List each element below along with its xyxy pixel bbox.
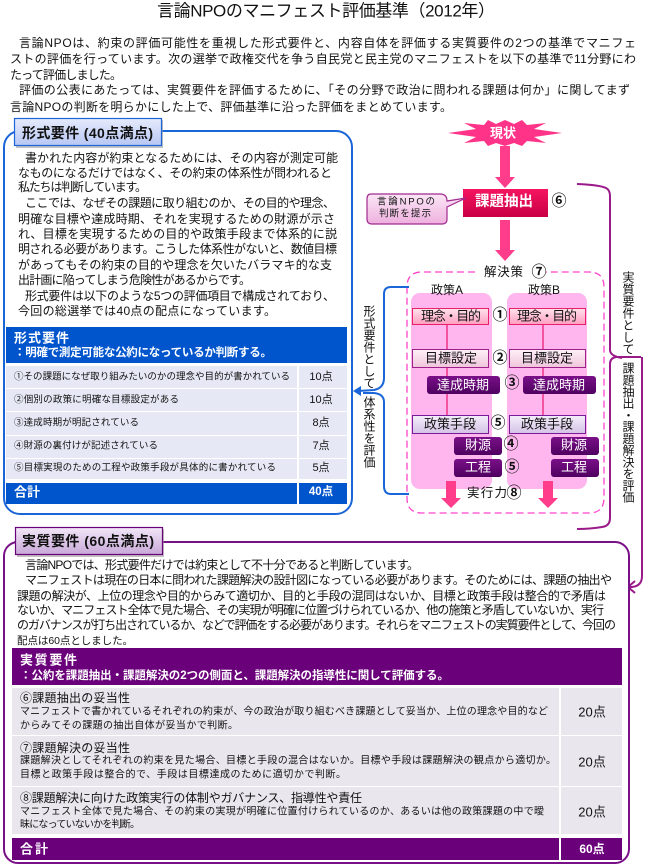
text block: formal requirements description: 形式要件は以下のような5つの評価項目で構成されており、 bbox=[25, 289, 335, 303]
bracket arrow: substantive requirements bbox=[577, 184, 642, 593]
dashed box: solutions bbox=[407, 272, 604, 513]
text block: formal requirements description: 明される必要があります。こうした体系性がないと、数値目標 bbox=[18, 241, 337, 256]
boxes: ideals and purpose: 理念・目的 bbox=[517, 308, 577, 324]
box: issue extraction bbox=[463, 189, 548, 217]
text block: formal requirements description: 私たちは判断しています。 bbox=[18, 180, 147, 194]
number 6: ⑥ bbox=[551, 192, 567, 210]
item numbers: ① bbox=[492, 306, 508, 324]
total row: 合計 bbox=[20, 842, 48, 856]
boxes: funding: 財源 bbox=[561, 438, 587, 452]
text block: formal requirements description: 明確な目標や達成時期、それを実現するための財源が示さ bbox=[18, 211, 335, 226]
box: issue extraction: 課題抽出 bbox=[475, 192, 533, 210]
arrow: issue extraction to solutions bbox=[495, 220, 515, 261]
panel: formal requirements bbox=[4, 118, 352, 514]
label: as substantive requirement: 実質要件として bbox=[621, 271, 635, 355]
boxes: policy means bbox=[412, 416, 586, 434]
row 5: ⑤目標実現のための工程や政策手段が具体的に書かれている bbox=[14, 462, 276, 474]
column: policy A bbox=[411, 283, 492, 489]
icon: starburst current state bbox=[448, 120, 562, 146]
row 7: 課題解決としてそれぞれの約束を見た場合、目標と手段の混合はないか。目標や手段は課題解決の観点から適切か。 bbox=[20, 754, 556, 766]
intro text bbox=[10, 35, 636, 114]
label: execution capacity bbox=[467, 484, 522, 502]
row 6 bbox=[12, 688, 622, 735]
text block: formal requirements description: れ、目標を実現するための目的や政策手段まで体系的に説 bbox=[18, 226, 337, 241]
text block: formal requirements description: 今回の総選挙では40点の配点になっています。 bbox=[18, 303, 276, 318]
label: evaluate issue extraction and resolution: 課題抽出・課題解決を評価 bbox=[621, 362, 635, 503]
label: evaluate structure: 体系性を評価 bbox=[362, 396, 376, 468]
row 3: 8点 bbox=[312, 416, 330, 429]
column: policy A: 政策A bbox=[431, 283, 463, 297]
table header: 形式要件 bbox=[14, 330, 69, 346]
item numbers: ⑤ bbox=[490, 414, 506, 432]
total row: 合計 bbox=[14, 484, 40, 500]
text block: formal requirements description: があってもその約束の目的や理念を欠いたバラマキ的な支 bbox=[18, 257, 332, 272]
number 7: ⑦ bbox=[531, 264, 547, 280]
row 6: 20点 bbox=[578, 704, 606, 720]
row 7: 目標と政策手段は整合的で、手段は目標達成のために適切かで判断。 bbox=[20, 768, 346, 780]
arrow: policy A output bbox=[441, 481, 461, 508]
bracket arrow: formal requirements bbox=[353, 287, 409, 494]
label: as formal requirement: 形式要件として bbox=[362, 305, 376, 389]
total row: 40点 bbox=[309, 484, 334, 498]
title: 言論NPOのマニフェスト評価基準（2012年） bbox=[157, 2, 495, 20]
total row bbox=[12, 838, 622, 860]
tab: substantive requirements heading: 実質要件 (60点満点) bbox=[22, 533, 154, 549]
item numbers bbox=[490, 306, 520, 476]
text block: substantive requirements description: 言論NPOでは、形式要件だけでは約束として不十分であると判断しています。 bbox=[25, 557, 419, 572]
boxes: funding bbox=[454, 437, 599, 455]
item numbers: ③ bbox=[504, 374, 520, 392]
label: execution capacity: ⑧ bbox=[506, 484, 522, 502]
boxes: target date: 達成時期 bbox=[533, 378, 585, 392]
table header: 実質要件 bbox=[20, 652, 77, 668]
boxes: ideals and purpose bbox=[412, 308, 586, 324]
table: substantive requirements scores bbox=[12, 648, 622, 860]
intro text: 言論NPOの判断を明らかにした上で、評価基準に沿った評価をまとめています。 bbox=[10, 99, 452, 114]
row 1: ①その課題になぜ取り組みたいのかの理念や目的が書かれている bbox=[14, 370, 290, 382]
table: formal requirements scores bbox=[6, 327, 347, 504]
row 2 bbox=[6, 389, 347, 411]
intro text: 言論NPOは、約束の評価可能性を重視した形式要件と、内容自体を評価する実質要件の2つの基準でマニフェ bbox=[19, 35, 636, 50]
row 8: 20点 bbox=[578, 804, 606, 820]
total row: 60点 bbox=[579, 841, 605, 856]
row 7: 20点 bbox=[578, 754, 606, 770]
boxes: funding: 財源 bbox=[465, 438, 491, 452]
panel: substantive requirements bbox=[4, 528, 629, 863]
text block: substantive requirements description bbox=[17, 557, 616, 647]
label: execution capacity: 実行力 bbox=[467, 485, 507, 500]
boxes: process: 工程 bbox=[465, 460, 491, 474]
text block: formal requirements description bbox=[18, 150, 338, 318]
intro text: たって評価しました。 bbox=[10, 68, 122, 82]
text block: formal requirements description: 書かれた内容が約束となるためには、その内容が測定可能 bbox=[25, 150, 338, 165]
row 3: ③達成時期が明記されている bbox=[14, 416, 139, 428]
boxes: process bbox=[454, 459, 599, 477]
callout: Genron NPO judgment: 判断を提示 bbox=[379, 208, 431, 220]
text block: substantive requirements description: マニフェストは現在の日本に問われた課題解決の設計図になっている必要があります。そのためには、課題の抽出や bbox=[25, 572, 612, 587]
row 8: マニフェスト全体で見た場合、その約束の実現が明確に位置付けられているのか、あるいは他の政策課題の中で曖 bbox=[20, 804, 544, 818]
item numbers: ④ bbox=[503, 436, 519, 452]
total row bbox=[6, 483, 347, 504]
boxes: target date: 達成時期 bbox=[437, 378, 489, 392]
row 8: ⑧課題解決に向けた政策実行の体制やガバナンス、指導性や責任 bbox=[20, 790, 362, 805]
tab: substantive requirements heading bbox=[16, 528, 164, 557]
row 1: 10点 bbox=[309, 370, 333, 383]
row 4: 7点 bbox=[312, 439, 330, 452]
row 5: 5点 bbox=[312, 461, 330, 474]
text block: substantive requirements description: ないか、マニフェスト全体で見た場合、その実現が明確に位置づけられているか、他の施策と矛盾していないか、実行 bbox=[17, 602, 604, 617]
icon: starburst current state: 現状 bbox=[490, 126, 516, 140]
table header: ：公約を課題抽出・課題解決の2つの側面と、課題解決の指導性に関して評価する。 bbox=[20, 668, 449, 682]
callout: Genron NPO judgment: 言論NPOの bbox=[377, 196, 435, 208]
text block: formal requirements description: ここでは、なぜその課題に取り組むのか、その目的や理念、 bbox=[25, 195, 335, 210]
text block: substantive requirements description: のガバナンスが打ち出されているか、などで評価をする必要があります。それらをマニフェストの実質要件として、今回の bbox=[17, 617, 616, 632]
text block: formal requirements description: 出計画に陥ってしまう危険性があるからです。 bbox=[18, 272, 251, 287]
intro text: ストの評価を行っています。次の選挙で政権交代を争う自民党と民主党のマニフェストを以下の基準で11分野にわ bbox=[10, 51, 636, 66]
row 4: ④財源の裏付けが記述されている bbox=[14, 440, 158, 452]
intro text: 評価の公表にあたっては、実質要件を評価するために、「その分野で政治に問われる課題は何か」に関してまず bbox=[19, 82, 630, 97]
arrow: policy B output bbox=[538, 481, 558, 508]
table header bbox=[12, 648, 622, 685]
boxes: process: 工程 bbox=[561, 460, 587, 474]
row 8 bbox=[12, 787, 622, 834]
diagram: policy evaluation flow bbox=[353, 120, 642, 593]
boxes: goal setting: 目標設定 bbox=[425, 350, 477, 366]
row 2: 10点 bbox=[309, 393, 333, 406]
row 7 bbox=[12, 736, 622, 786]
tab: formal requirements heading: 形式要件 (40点満点) bbox=[22, 125, 153, 141]
boxes: goal setting: 目標設定 bbox=[521, 350, 573, 366]
row 2: ②個別の政策に明確な目標設定がある bbox=[14, 394, 179, 406]
row 4 bbox=[6, 436, 347, 458]
callout: Genron NPO judgment bbox=[367, 194, 466, 224]
boxes: ideals and purpose: 理念・目的 bbox=[421, 308, 481, 324]
row 8: 昧になっていないかを判断。 bbox=[20, 818, 140, 830]
boxes: target date bbox=[427, 376, 596, 394]
table header bbox=[6, 327, 347, 363]
row 6: ⑥課題抽出の妥当性 bbox=[20, 691, 130, 705]
boxes: goal setting bbox=[412, 350, 586, 368]
row 6: からみてその課題の抽出自体が妥当かで判断。 bbox=[20, 718, 238, 732]
text block: substantive requirements description: 配点は60点としました。 bbox=[17, 635, 133, 647]
text block: formal requirements description: なものになるだけではなく、その約束の体系性が問われると bbox=[18, 165, 332, 180]
tab: formal requirements heading bbox=[14, 118, 163, 148]
table header: ：明確で測定可能な公約になっているか判断する。 bbox=[14, 345, 272, 359]
text block: substantive requirements description: 課題の解決が、上位の理念や目的からみて適切か、目的と手段の混同はないか、目標と政策手段は整合的で矛盾は bbox=[17, 588, 606, 603]
row 5 bbox=[6, 459, 347, 479]
item numbers: ② bbox=[492, 350, 508, 366]
boxes: policy means: 政策手段 bbox=[424, 416, 476, 432]
arrow: current state to issue extraction bbox=[495, 146, 515, 188]
row 1 bbox=[6, 366, 347, 388]
column: policy B bbox=[507, 283, 587, 489]
boxes: policy means: 政策手段 bbox=[521, 416, 573, 432]
item numbers: ⑤ bbox=[504, 458, 520, 476]
row 7: ⑦課題解決の妥当性 bbox=[20, 741, 130, 755]
column: policy B: 政策B bbox=[528, 283, 560, 297]
row 6: マニフェストで書かれているそれぞれの約束が、今の政治が取り組むべき課題として妥当か、上位の理念や目的など bbox=[20, 704, 548, 718]
row 3 bbox=[6, 412, 347, 435]
label: solutions: 解決策 bbox=[484, 264, 523, 279]
